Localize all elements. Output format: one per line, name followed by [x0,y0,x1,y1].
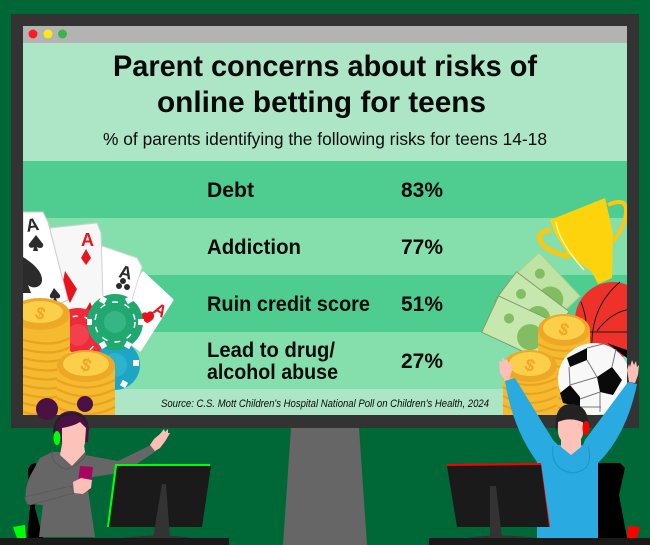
left desk [0,538,229,545]
row: debt [207,179,443,202]
screen background [23,43,627,415]
right person cheering [499,357,640,538]
row: addiction [207,236,443,259]
card: ace of spades [23,212,68,303]
right computer monitor [447,463,550,538]
headset [54,414,87,445]
phone [78,466,93,491]
basketball [575,282,627,357]
coin stack: front right: $ [522,355,538,376]
coin stack: left [23,298,70,415]
neck [60,444,85,466]
row: drug and alcohol abuse: Lead to drug/ [207,339,335,362]
card: ace of hearts [132,271,174,352]
card: ace of diamonds: A [81,230,94,250]
green chair tab [13,525,26,538]
illustration: playing cards and chips [10,212,172,416]
title: online betting for teens [157,86,486,119]
chip: green [87,294,144,350]
row: addiction: Addiction [207,236,301,259]
browser title bar [23,26,627,43]
title [113,50,538,119]
neck [561,435,581,455]
row: drug and alcohol abuse: alcohol abuse [207,361,338,384]
hair [54,411,89,442]
torso [26,452,95,537]
coin stack: front [57,350,115,415]
source note: Source: C.S. Mott Children's Hospital National Poll on Children's Health, 2024 [161,398,489,410]
coin stack: back [538,314,590,415]
chip: blue [99,346,140,390]
card: ace of hearts: A [150,299,170,322]
hands [499,357,512,381]
coin stack: left: $ [32,303,48,324]
row: debt: Debt [207,179,254,202]
face [62,422,86,455]
row: debt: 83% [401,179,443,202]
right desk [429,538,650,545]
hood outline [553,446,590,473]
trophy [539,198,626,284]
hand holding phone [73,478,92,494]
head [558,417,583,445]
card: ace of diamonds [50,222,104,310]
subtitle: % of parents identifying the following risks for teens 14-18 [103,129,547,149]
headset [582,421,590,435]
chair [598,463,627,538]
monitor stand [283,428,367,545]
raised arm and hand [85,445,156,478]
row: drug and alcohol abuse: 27% [401,350,443,373]
chip: red [68,308,102,353]
hair [556,404,588,432]
arms and torso [505,378,637,538]
card: ace of clubs: A [117,261,134,284]
bills of money [482,252,580,360]
row: addiction: 77% [401,236,443,259]
left person with phone [13,396,170,538]
monitor frame [11,14,639,428]
row: ruin credit score: 51% [401,293,443,316]
title: Parent concerns about risks of [113,50,538,83]
hood outline [52,449,86,469]
row: ruin credit score: Ruin credit score [207,293,370,316]
table row bands [23,161,627,389]
card: ace of clubs [102,246,142,300]
forearm [25,486,74,505]
table: row labels and values [207,179,443,384]
red chair tab [627,526,640,538]
soccer ball [558,343,630,415]
row: drug and alcohol abuse [207,339,443,384]
illustration: trophy, money and sports balls [481,198,627,415]
left computer monitor [107,464,211,538]
chair [27,463,43,538]
coin stack: front: $ [78,354,94,376]
card: ace of spades: A [24,214,40,236]
hair buns [36,398,58,420]
coin stack: back: $ [556,319,572,340]
coin stack: front right [503,350,557,415]
